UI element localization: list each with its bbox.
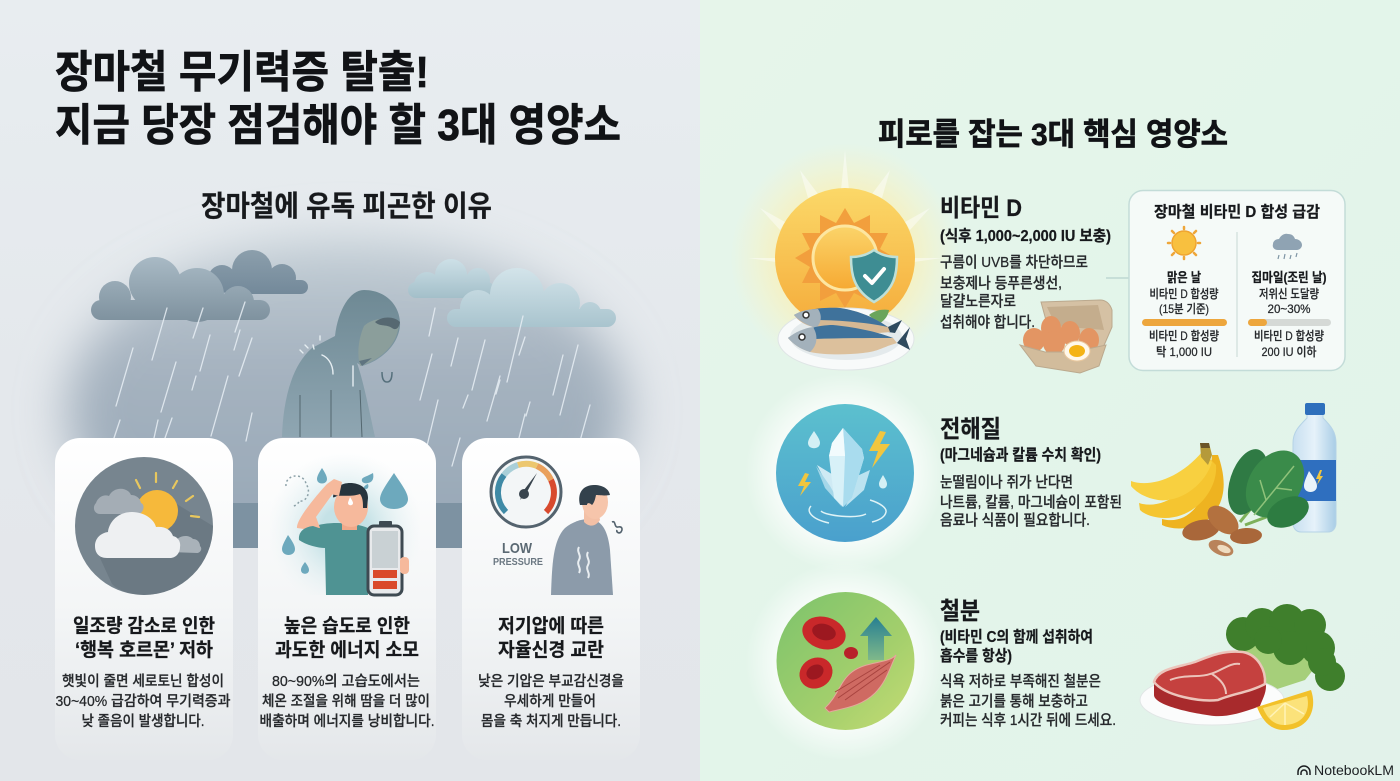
column: rainy day: 20~30% <box>1268 302 1311 316</box>
icon: cloud covering sun <box>75 457 213 595</box>
icon: water bottle <box>1293 403 1336 532</box>
panel: cause card 2 <box>258 438 436 728</box>
logo: NotebookLM: NotebookLM <box>1314 763 1394 778</box>
iron text: 커피는 식후 1시간 뒤에 드세요. <box>940 712 1116 729</box>
icon: low pressure gauge and person <box>491 457 622 595</box>
electrolytes text <box>940 474 1122 529</box>
illustration: rainy scene <box>67 238 627 582</box>
card 2 heading <box>275 615 419 661</box>
column: sunny day <box>1142 227 1227 359</box>
cloud: right large <box>447 268 616 327</box>
card 1 text <box>56 673 230 730</box>
icon: almonds <box>1180 500 1263 559</box>
panel: right background <box>700 0 1400 781</box>
column: rainy day: 저위신 도달량 <box>1259 286 1319 301</box>
card 2 heading: 높은 습도로 인한 <box>284 615 410 637</box>
vitamin D text: 구름이 UVB를 차단하므로 <box>940 254 1088 271</box>
card 3 text: 우세하게 만들어 <box>504 693 596 710</box>
icon: low pressure gauge and person: PRESSURE <box>493 557 543 568</box>
card 1 text: 30~40% 급감하여 무기력증과 <box>56 693 230 710</box>
vitamin D dose: (식후 1,000~2,000 IU 보충) <box>940 227 1111 245</box>
column: sunny day: 비타민 D 합성량 <box>1149 328 1219 343</box>
icon: red blood cells and muscle <box>746 561 946 761</box>
card 1 text: 낮 졸음이 발생합니다. <box>82 713 204 730</box>
card 3 heading <box>498 615 604 661</box>
iron text: 붉은 고기를 통해 보충하고 <box>940 693 1088 710</box>
icon: crystal with water ripple <box>745 373 945 573</box>
cloud: back dark <box>208 250 308 294</box>
electrolytes note: (마그네슘과 칼륨 수치 확인) <box>940 446 1101 464</box>
rain <box>112 302 590 466</box>
electrolytes heading: 전해질 <box>940 416 1001 443</box>
iron note: (비타민 C의 함께 섭취하여 <box>940 628 1093 646</box>
column: rainy day: 비타민 D 합성량 <box>1254 328 1324 343</box>
column: rainy day <box>1248 234 1331 359</box>
panel: cause card 1 <box>55 438 233 728</box>
card 2 text: 체온 조절을 위해 땀을 더 많이 <box>262 693 430 710</box>
icon: sweating man with low battery <box>282 467 409 596</box>
column: sunny day: 맑은 날 <box>1167 270 1201 285</box>
icon: spinach leaves <box>1220 440 1316 534</box>
figure: hooded person <box>282 290 400 437</box>
column: sunny day: 탁 1,000 IU <box>1156 345 1212 359</box>
electrolytes text: 눈떨림이나 쥐가 난다면 <box>940 474 1073 491</box>
heading: why so tired: 장마철에 유독 피곤한 이유 <box>201 190 492 223</box>
icon: broccoli <box>1226 604 1345 692</box>
icon: egg carton <box>1020 300 1112 373</box>
iron heading: 철분 <box>940 598 980 625</box>
vitamin D text: 달걀노른자로 <box>940 293 1016 310</box>
card 3 text <box>478 673 624 730</box>
icon: bananas <box>1131 443 1224 528</box>
connector <box>1106 277 1129 279</box>
panel: vitamin D synthesis comparison <box>1129 190 1345 370</box>
card 2 text: 80~90%의 고습도에서는 <box>272 673 420 690</box>
electrolytes text: 음료나 식품이 필요합니다. <box>940 512 1090 529</box>
title: 장마철 무기력증 탈출! <box>55 48 429 97</box>
vitamin D text: 섭취해야 합니다. <box>940 314 1035 331</box>
card 2 heading: 과도한 에너지 소모 <box>275 639 419 661</box>
card 1 heading: 일조량 감소로 인한 <box>73 615 215 637</box>
iron text: 식욕 저하로 부족해진 철분은 <box>940 673 1101 690</box>
card 2 text <box>260 673 434 730</box>
vitamin D text <box>940 254 1088 331</box>
column: rainy day: 집마일(조린 날) <box>1252 270 1326 285</box>
cloud: right small <box>408 259 495 298</box>
card 1 text: 햇빛이 줄면 세로토닌 합성이 <box>62 673 224 690</box>
vitamin D text: 보충제나 등푸른생선, <box>940 275 1062 292</box>
column: sunny day: (15분 기준) <box>1159 302 1209 316</box>
vitamin D heading: 비타민 D <box>940 195 1022 222</box>
card 2 text: 배출하며 에너지를 낭비합니다. <box>260 713 434 730</box>
title <box>55 48 621 150</box>
iron text <box>940 673 1116 729</box>
icon: lemon wedge <box>1257 690 1313 730</box>
card 3 heading: 저기압에 따른 <box>498 615 604 637</box>
icon: low pressure gauge and person: LOW <box>502 540 533 557</box>
iron note: 흡수를 항상) <box>940 647 1012 665</box>
panel: left background <box>0 0 700 781</box>
panel: cause card 3 <box>462 438 640 760</box>
iron note <box>940 628 1093 665</box>
section: iron <box>746 561 1345 761</box>
column: sunny day: 비타민 D 합성량 <box>1150 286 1218 301</box>
icon: steak on plate <box>1140 652 1284 725</box>
card 3 text: 낮은 기압은 부교감신경을 <box>478 673 624 690</box>
electrolytes text: 나트륨, 칼륨, 마그네슘이 포함된 <box>940 494 1122 511</box>
card 3 text: 몸을 축 처지게 만듭니다. <box>481 713 621 730</box>
title: 지금 당장 점검해야 할 3대 영양소 <box>55 101 621 150</box>
panel heading: 장마철 비타민 D 합성 급감 <box>1154 203 1320 221</box>
column: rainy day: 200 IU 이하 <box>1262 345 1316 359</box>
card 3 heading: 자율신경 교란 <box>498 639 604 661</box>
card 1 heading: ‘행복 호르몬’ 저하 <box>75 639 213 661</box>
card 1 heading <box>73 615 215 661</box>
cloud: left large <box>91 257 270 322</box>
section: electrolytes <box>745 373 1336 573</box>
icon: sun with shield and fish <box>730 143 960 373</box>
section: vitamin D <box>730 143 1345 373</box>
heading: three key nutrients: 피로를 잡는 3대 핵심 영양소 <box>878 117 1228 152</box>
